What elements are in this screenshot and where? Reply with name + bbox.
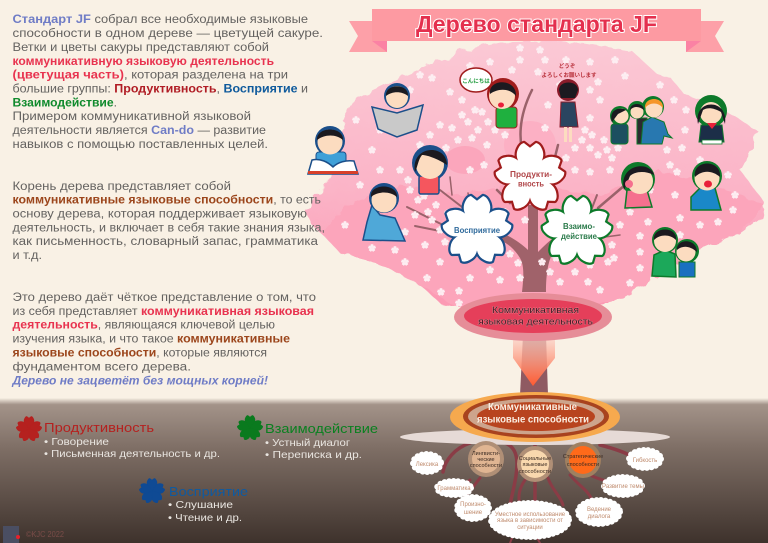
root circle: social language abilities — [517, 446, 553, 482]
legend: Взаимодействие: Взаимодействие — [265, 422, 378, 436]
cloud: topic development — [602, 477, 644, 495]
legend: Восприятие — [139, 478, 248, 524]
icon: bowing woman: よろしくお願いします — [541, 72, 597, 79]
root circle: strategic abilities — [563, 442, 603, 478]
oval: communicative language abilities: языковые способности — [477, 414, 589, 426]
cloud: pronunciation — [457, 497, 489, 519]
icon: boy reading a book — [308, 126, 358, 174]
text block: intro about the JF Standard: деятельности является Can-do — развитие — [12, 125, 266, 137]
text block: summary: из себя представляет коммуникативная языковая — [12, 306, 314, 318]
arrow from activity to abilities — [513, 335, 555, 386]
trunk below the canopy oval — [520, 335, 548, 395]
cloud: pronunciation: Произно- — [460, 502, 486, 508]
text block: the root of the tree — [12, 181, 325, 262]
title ribbon — [349, 9, 724, 52]
small sakura blossoms — [341, 44, 739, 307]
legend: Восприятие: • Слушание — [168, 499, 233, 511]
cloud: vocabulary: Лексика — [416, 462, 439, 468]
text block: summary: языковые способности , которые являются — [12, 348, 267, 360]
legend: Восприятие: Восприятие — [169, 485, 248, 499]
copyright: ©KJC 2022 — [26, 530, 65, 539]
text block: intro about the JF Standard: (цветущая часть) , которая разделена на три — [12, 70, 288, 82]
cloud: conducting a dialogue: Ведение — [587, 507, 612, 513]
icon: man saying hello with speech bubble — [460, 68, 519, 128]
legend: Продуктивность: • Письменная деятельность и др. — [44, 448, 220, 460]
cloud: grammar — [437, 481, 471, 495]
icon: man listening — [363, 183, 405, 241]
legend: Продуктивность — [16, 416, 220, 460]
icon: three colleagues in discussion — [610, 96, 672, 144]
oval: communicative language abilities: Коммуникативные — [488, 402, 577, 413]
text block: summary: изучения языка, и что такое коммуникативные — [12, 334, 290, 346]
pale ground ellipse — [400, 429, 670, 445]
root circle: linguistic abilities: способности — [470, 463, 502, 469]
ground — [0, 398, 768, 543]
text block: the root of the tree: основу дерева, которая поддерживает языковую — [12, 208, 307, 220]
tree branches — [407, 90, 625, 292]
icon: bowing woman — [541, 62, 597, 142]
icon: girl with music notes — [412, 145, 448, 194]
cloud: flexibility: Гибкость — [633, 458, 657, 464]
text block: the root of the tree: деятельность, и включает в себя такие знания языка, — [12, 222, 325, 234]
flower: Взаимодействие: действие — [561, 231, 597, 241]
root circle: linguistic abilities: Лингвисти- — [472, 451, 500, 457]
root circle: social language abilities: языковые — [523, 462, 547, 468]
cloud: flexibility — [629, 450, 661, 468]
root circle: linguistic abilities: ческие — [477, 457, 495, 463]
roots — [443, 440, 635, 543]
root circle: social language abilities: способности — [519, 469, 551, 475]
text block: intro about the JF Standard: Стандарт JF собрал все необходимые языковые — [12, 14, 308, 26]
text block: summary: Это дерево даёт чёткое представление о том, что — [12, 292, 316, 304]
cloud: appropriate use of language — [491, 503, 569, 537]
text block: intro about the JF Standard — [12, 14, 323, 151]
icon: man on the phone — [691, 161, 722, 210]
icon: woman on the phone — [621, 162, 655, 208]
legend: Взаимодействие: • Устный диалог — [265, 437, 350, 449]
flower: Взаимодействие — [541, 197, 613, 266]
oval: communicative language activity: Коммуникативная — [492, 305, 579, 316]
text block: the root of the tree: как письменность, словарный запас, грамматика — [12, 236, 319, 248]
text block: summary: фундаментом всего дерева. — [12, 362, 191, 374]
legend: Взаимодействие: • Переписка и др. — [265, 449, 362, 461]
legend: Взаимодействие — [237, 416, 378, 461]
cloud: topic development: Развитие темы — [602, 484, 644, 490]
icon: man saying hello with speech bubble: こんにちは — [462, 77, 490, 85]
text block: intro about the JF Standard: коммуникативную языковую деятельность — [12, 56, 274, 68]
cloud: vocabulary — [413, 454, 441, 472]
icon: adult and child — [652, 227, 699, 277]
text block: summary: деятельность , являющаяся ключевой целью — [12, 320, 275, 332]
root circle: social language abilities: Социальные — [519, 456, 551, 462]
flower: Продуктивность: вность — [518, 178, 544, 188]
oval: communicative language activity: языковая деятельность — [478, 316, 593, 328]
flower: Продуктивность: Продукти- — [510, 169, 552, 179]
flower: Взаимодействие: Взаимо- — [563, 221, 595, 231]
legend: Восприятие: • Чтение и др. — [168, 512, 242, 524]
text block: the root of the tree: и т.д. — [12, 250, 42, 262]
root circle: strategic abilities: Стратегические — [563, 454, 603, 460]
logo — [3, 526, 20, 543]
root circle: linguistic abilities — [468, 441, 504, 477]
flower: Продуктивность — [494, 143, 566, 212]
cloud: appropriate use of language: ситуации — [517, 525, 543, 531]
text block: intro about the JF Standard: Ветки и цветы сакуры представляют собой — [12, 42, 269, 54]
text block: intro about the JF Standard: способности в одном дереве — цветущей сакуре. — [12, 28, 323, 40]
text block: intro about the JF Standard: большие группы: Продуктивность , Восприятие и — [12, 84, 308, 96]
cloud: conducting a dialogue: диалога — [588, 514, 611, 520]
cloud: conducting a dialogue — [578, 500, 620, 524]
text block: intro about the JF Standard: Примером коммуникативной языковой — [12, 111, 251, 123]
root circle: strategic abilities: способности — [567, 462, 599, 468]
cloud: grammar: Грамматика — [437, 486, 471, 492]
text block: the root of the tree: коммуникативные языковые способности , то есть — [12, 194, 321, 206]
text block: summary — [11, 292, 316, 387]
oval: communicative language abilities — [450, 392, 620, 442]
icon: person with newspaper — [372, 83, 423, 137]
cloud: appropriate use of language: Уместное использование — [495, 512, 566, 518]
flower: Восприятие: Восприятие — [454, 225, 500, 235]
tree canopy — [305, 40, 765, 310]
cloud: appropriate use of language: языка в зависимости от — [497, 518, 563, 524]
flower: Восприятие — [441, 196, 513, 265]
text block: intro about the JF Standard: навыков с помощью поставленных целей. — [12, 139, 268, 151]
cloud: pronunciation: шение — [464, 510, 483, 516]
legend: Продуктивность: Продуктивность — [44, 421, 154, 435]
icon: bowing woman: どうぞ — [559, 62, 576, 70]
text block: intro about the JF Standard: Взаимодействие . — [12, 98, 117, 110]
text block: summary: Дерево не зацветёт без мощных корней! — [11, 375, 268, 387]
oval: communicative language activity — [454, 293, 612, 341]
text block: the root of the tree: Корень дерева представляет собой — [12, 181, 231, 193]
title ribbon: Дерево стандарта JF — [416, 11, 657, 37]
legend: Продуктивность: • Говорение — [44, 436, 109, 448]
icon: woman writing — [695, 95, 727, 144]
